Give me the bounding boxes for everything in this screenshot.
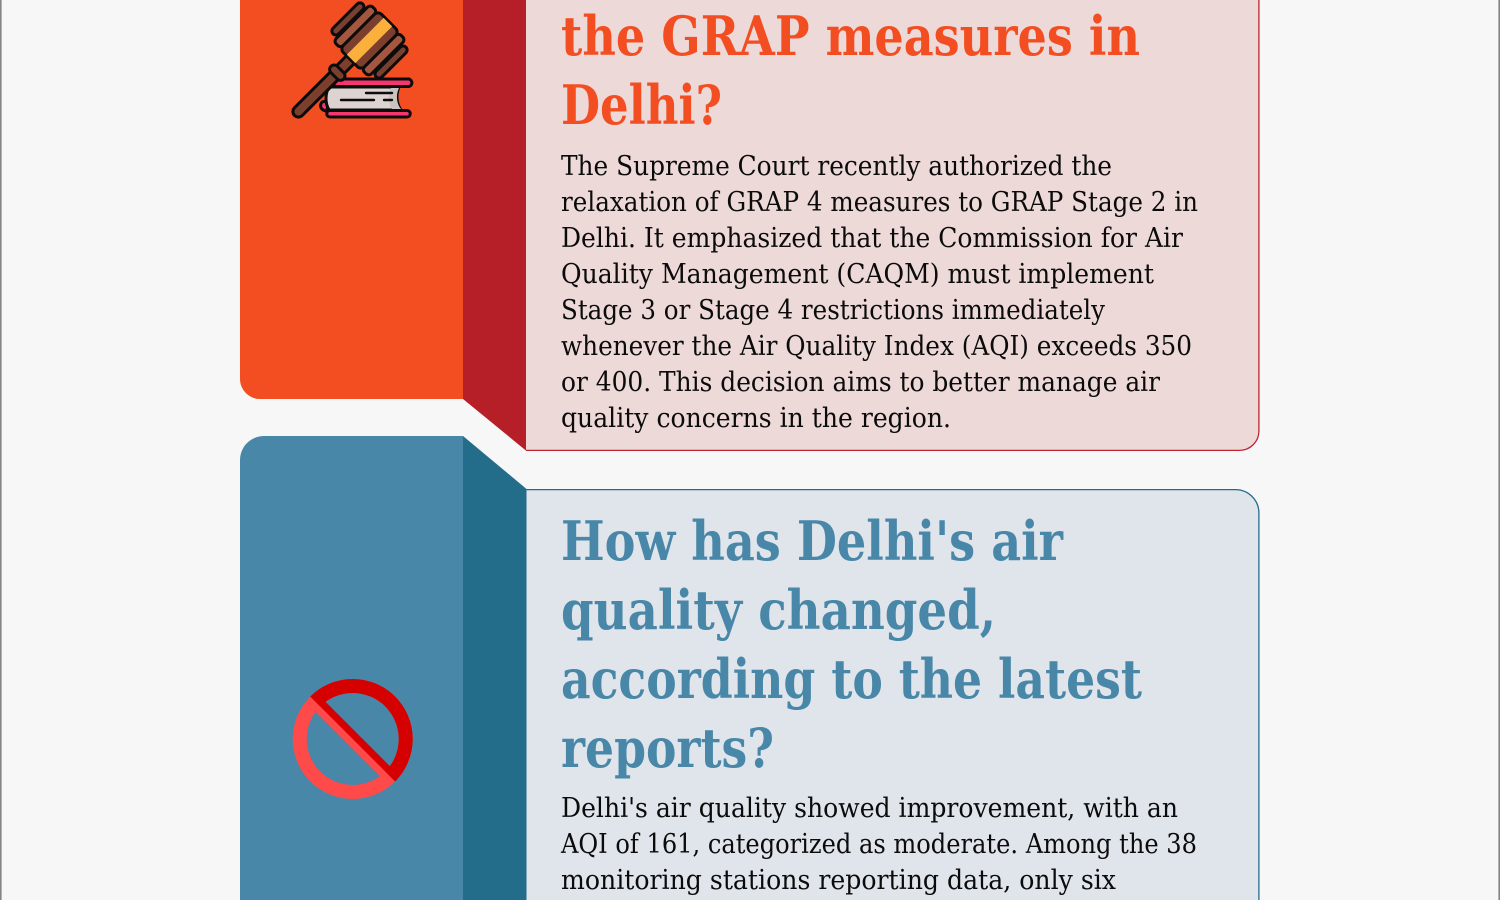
body text: AQI of 161, categorized as moderate. Among the 38: [560, 829, 1197, 860]
heading: the GRAP measures in: [561, 4, 1140, 68]
heading: [561, 509, 1142, 780]
icon: prohibition sign: [300, 686, 406, 792]
body text: quality concerns in the region.: [561, 403, 951, 434]
heading: [561, 4, 1140, 137]
body text: or 400. This decision aims to better manage air: [561, 367, 1160, 398]
heading: reports?: [561, 716, 774, 780]
body text: [560, 793, 1197, 896]
heading: quality changed,: [561, 578, 996, 642]
fold: dark blue: [463, 436, 526, 900]
card background: pale blue: [526, 489, 1259, 900]
body text: whenever the Air Quality Index (AQI) exceeds 350: [561, 331, 1192, 362]
panel: GRAP measures (red): [240, 0, 1259, 451]
icon: gavel and book: [270, 0, 413, 140]
body text: [561, 151, 1198, 434]
panel: air quality (blue): [240, 436, 1259, 900]
body text: Quality Management (CAQM) must implement: [561, 259, 1154, 290]
body text: relaxation of GRAP 4 measures to GRAP Stage 2 in: [561, 187, 1198, 218]
body text: The Supreme Court recently authorized the: [561, 151, 1112, 182]
body text: Stage 3 or Stage 4 restrictions immediately: [561, 295, 1106, 326]
card background: pink: [526, 0, 1259, 451]
body text: monitoring stations reporting data, only six: [561, 865, 1116, 896]
icon tab: orange: [240, 0, 463, 399]
heading: according to the latest: [561, 647, 1142, 711]
icon tab: blue: [240, 436, 463, 900]
heading: Delhi?: [561, 73, 722, 137]
body text: Delhi's air quality showed improvement, with an: [561, 793, 1178, 824]
heading: How has Delhi's air: [561, 509, 1063, 573]
body text: Delhi. It emphasized that the Commission for Air: [561, 223, 1183, 254]
fold: dark red: [463, 0, 526, 451]
